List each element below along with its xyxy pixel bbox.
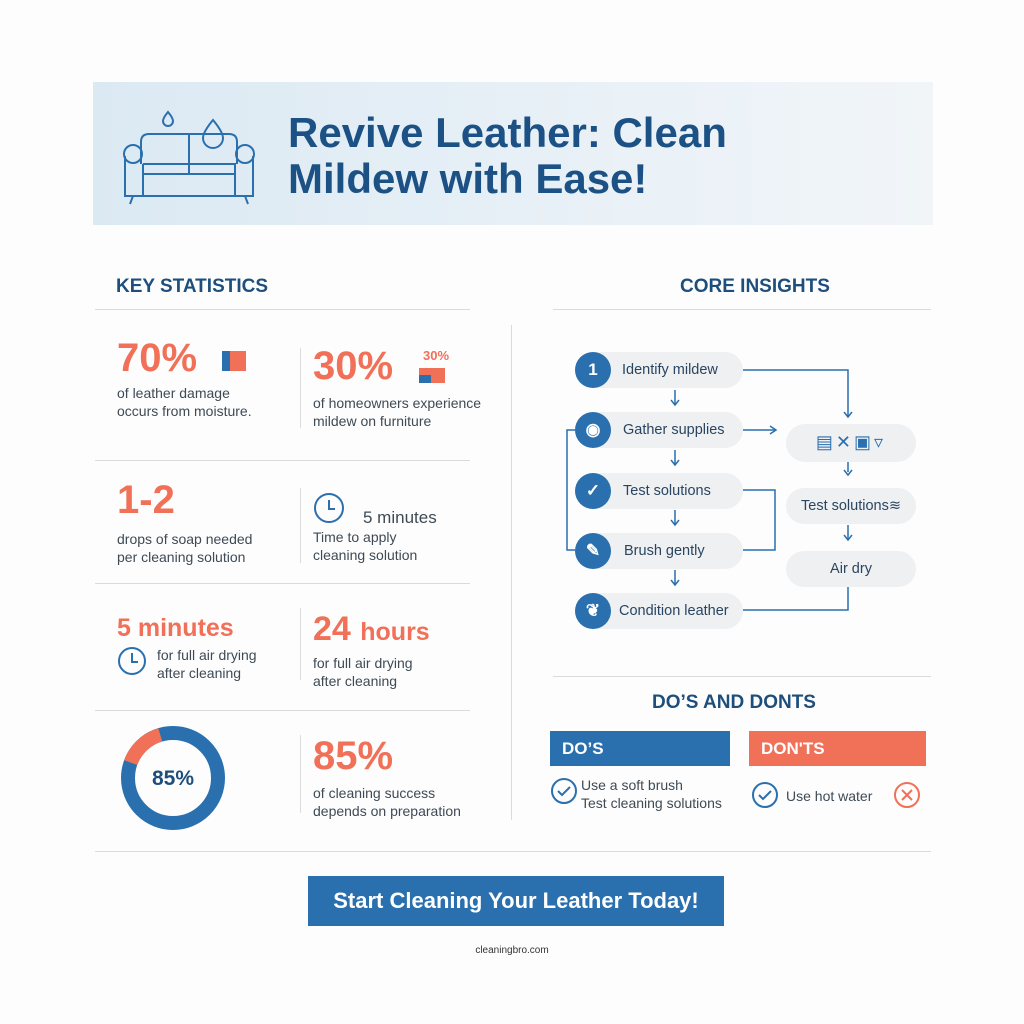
stat 85%	[313, 734, 461, 819]
stat 85%: of cleaning success	[313, 785, 435, 801]
donts panel	[749, 731, 926, 808]
stat 30%	[313, 344, 481, 429]
stat 5 minutes drying	[117, 614, 257, 681]
heading: core insights: CORE INSIGHTS	[680, 276, 830, 297]
stat 5 minutes apply: Time to apply	[313, 529, 397, 545]
stat 5 minutes drying: after cleaning	[157, 665, 241, 681]
stat 30%: 30%	[423, 348, 449, 363]
heading: dos and donts: DO’S AND DONTS	[652, 692, 816, 713]
flowchart: ✓	[586, 481, 600, 500]
right test solutions	[786, 488, 916, 524]
dos panel: DO’S	[562, 739, 604, 758]
flow step 4	[575, 533, 743, 569]
heading: key statistics: KEY STATISTICS	[116, 276, 268, 297]
stat 24 hours: for full air drying	[313, 655, 413, 671]
header banner	[93, 82, 933, 225]
air dry	[786, 551, 916, 587]
stat 70%: 70%	[117, 336, 197, 380]
stat 85%: 85%	[313, 734, 393, 778]
stat 30%: mildew on furniture	[313, 413, 431, 429]
flow step 2: Gather supplies	[623, 422, 725, 438]
stat 1-2: drops of soap needed	[117, 531, 252, 547]
dos panel: Use a soft brush	[581, 777, 683, 793]
donts panel: DON'TS	[761, 739, 825, 758]
flowchart	[566, 352, 916, 629]
stat 30%: 30%	[313, 344, 393, 388]
icon: sofa	[123, 110, 255, 204]
stat 5 minutes apply: 5 minutes	[363, 508, 437, 527]
stat 5 minutes apply	[313, 493, 437, 563]
right test solutions: Test solutions≋	[801, 498, 901, 514]
stat 5 minutes apply: cleaning solution	[313, 547, 417, 563]
stat 1-2	[117, 478, 252, 565]
flow step 5: Condition leather	[619, 603, 729, 619]
cta button: Start Cleaning Your Leather Today!	[333, 888, 699, 913]
stat 1-2: 1-2	[117, 478, 175, 522]
supplies pill	[786, 424, 916, 462]
flowchart: 1	[588, 360, 598, 379]
supplies pill: ▤✕▣▿	[816, 432, 886, 452]
air dry: Air dry	[830, 561, 872, 577]
cta button	[308, 876, 724, 926]
flow step 3: Test solutions	[623, 483, 711, 499]
stat 70%: occurs from moisture.	[117, 403, 252, 419]
stat 70%	[117, 336, 252, 419]
stat 30%: of homeowners experience	[313, 395, 481, 411]
stat 1-2: per cleaning solution	[117, 549, 245, 565]
flowchart: ◉	[586, 420, 600, 439]
donut chart 85%	[121, 726, 225, 830]
flow step 4: Brush gently	[624, 543, 705, 559]
stat 85%: depends on preparation	[313, 803, 461, 819]
flow step 1: Identify mildew	[622, 362, 718, 378]
title: Revive Leather: Clean	[288, 109, 727, 156]
donts panel: Use hot water	[786, 788, 872, 804]
stat 24 hours: 24 hours	[313, 610, 430, 648]
stat 24 hours	[313, 610, 430, 689]
stat 5 minutes drying: 5 minutes	[117, 614, 234, 642]
stat 5 minutes drying: for full air drying	[157, 647, 257, 663]
stats panel	[95, 336, 481, 830]
title: Mildew with Ease!	[288, 155, 647, 202]
donut chart 85%: 85%	[152, 767, 194, 790]
flowchart: ❦	[586, 601, 600, 620]
flow step 3	[575, 473, 743, 509]
flow step 1	[575, 352, 743, 388]
stat 70%: of leather damage	[117, 385, 230, 401]
title	[288, 109, 727, 202]
dos panel	[550, 731, 730, 811]
flow step 5	[575, 593, 743, 629]
dos panel: Test cleaning solutions	[581, 795, 722, 811]
flowchart: ✎	[586, 541, 600, 560]
stat 24 hours: after cleaning	[313, 673, 397, 689]
flow step 2	[575, 412, 743, 448]
footer: cleaningbro.com	[475, 945, 549, 956]
